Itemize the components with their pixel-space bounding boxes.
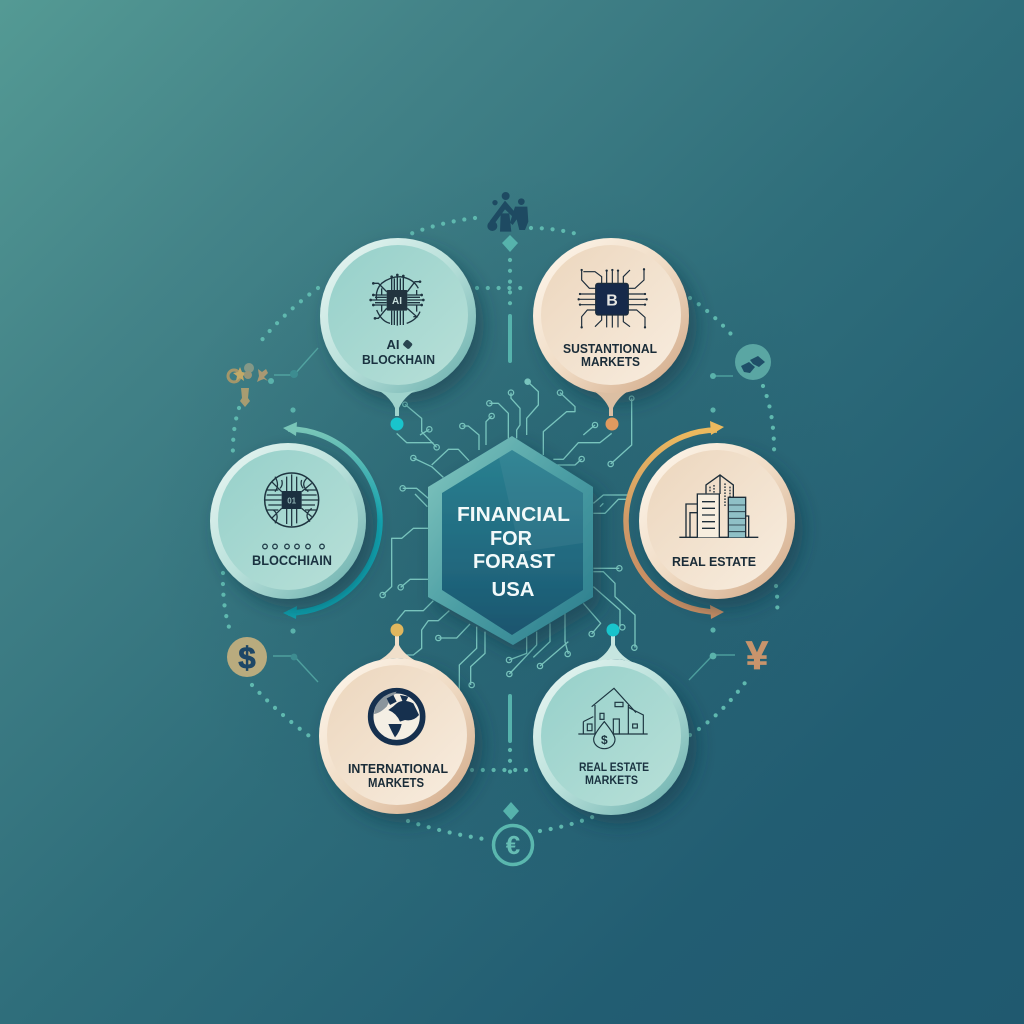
icon: gold gears bbox=[228, 363, 268, 407]
label bbox=[348, 761, 448, 790]
hexagon title: USA bbox=[492, 578, 535, 601]
disc bbox=[210, 443, 366, 599]
icon: circuit circle: 01 bbox=[287, 496, 297, 505]
hexagon title: FINANCIAL bbox=[457, 503, 570, 526]
label: BLOCCHIAIN bbox=[252, 553, 332, 568]
pointer and dot bbox=[592, 624, 634, 663]
hexagon body bbox=[428, 436, 593, 645]
panel: real estate bbox=[639, 443, 795, 599]
icon: globe bbox=[371, 691, 423, 743]
disc bbox=[319, 658, 475, 814]
disc bbox=[320, 238, 476, 394]
disc bbox=[533, 659, 689, 815]
pointer and dot bbox=[376, 624, 418, 662]
panel: sustantional markets bbox=[533, 238, 689, 430]
label: REAL ESTATE bbox=[672, 554, 756, 569]
label bbox=[563, 341, 657, 369]
pointer and dot bbox=[378, 390, 416, 430]
icon: blockchain chip bbox=[577, 268, 648, 328]
label: AI bbox=[386, 337, 400, 352]
icon: circuit circle bbox=[265, 473, 319, 527]
arrow: blockchain orbit bbox=[283, 422, 380, 619]
disc bbox=[533, 238, 689, 394]
icon: AI brain chip bbox=[369, 274, 425, 326]
label: SUSTANTIONAL bbox=[563, 341, 657, 356]
label: MARKETS bbox=[368, 775, 424, 790]
icon: dollar coin: $ bbox=[238, 640, 256, 675]
vertical connector top bbox=[502, 235, 518, 363]
icon: dollar coin bbox=[227, 637, 267, 677]
panel: blocchiain bbox=[210, 443, 366, 599]
hexagon title: FOR bbox=[490, 527, 532, 550]
icon: family house top bbox=[487, 192, 528, 232]
label: INTERNATIONAL bbox=[348, 761, 448, 776]
label: REAL ESTATE bbox=[579, 760, 649, 774]
icon: blockchain chip: B bbox=[606, 292, 618, 309]
label: MARKETS bbox=[581, 354, 640, 369]
icon: yen: ¥ bbox=[746, 634, 769, 678]
label bbox=[579, 760, 649, 787]
central shadow glow bbox=[150, 170, 870, 890]
callout lines and dots bbox=[268, 348, 735, 682]
hexagon title bbox=[457, 503, 570, 601]
icon: handshake coin bbox=[735, 344, 771, 380]
arrow: real estate orbit bbox=[626, 421, 724, 619]
label bbox=[362, 337, 435, 367]
dotted orbit rings bbox=[223, 218, 777, 839]
panel: real estate markets bbox=[533, 624, 689, 815]
circuit traces around hexagon bbox=[380, 379, 637, 690]
vertical connector bottom bbox=[503, 694, 519, 820]
central hexagon bbox=[428, 436, 593, 645]
label: MARKETS bbox=[585, 773, 638, 787]
panel: international markets bbox=[319, 624, 475, 814]
icon: euro bbox=[494, 826, 532, 864]
panel: AI blockchain bbox=[320, 238, 476, 430]
hexagon title: FORAST bbox=[473, 550, 555, 573]
pointer and dot bbox=[592, 390, 630, 430]
disc bbox=[639, 443, 795, 599]
icon: chain dots bbox=[263, 544, 324, 549]
label: BLOCKHAIN bbox=[362, 352, 435, 367]
icon: euro: € bbox=[506, 830, 520, 860]
icon: AI brain chip: AI bbox=[392, 296, 402, 307]
icon: houses with money drop bbox=[578, 688, 648, 749]
icon: city buildings bbox=[679, 475, 758, 537]
icon: houses with money drop: $ bbox=[601, 733, 608, 747]
